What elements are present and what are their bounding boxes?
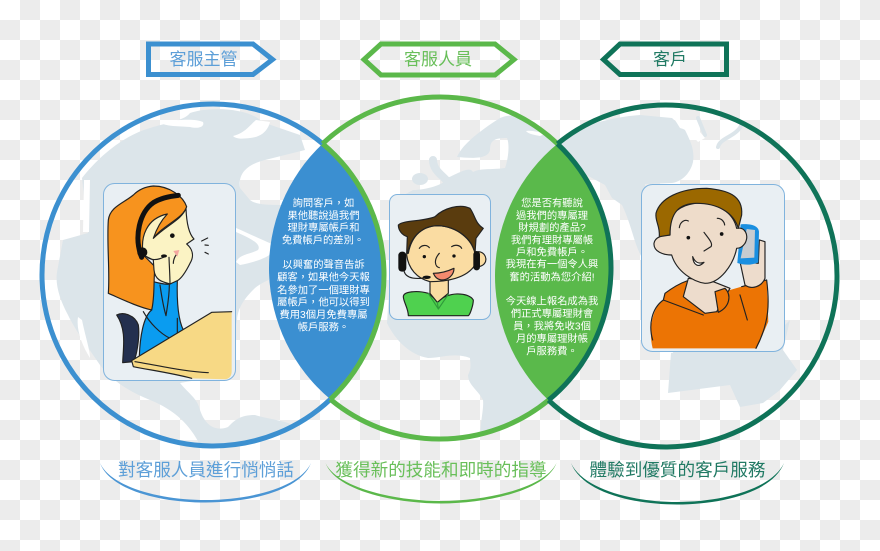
text: agent script: 財規劃的產品?: [518, 221, 586, 234]
text: supervisor instructions: 費用3個月免費專屬: [279, 308, 368, 321]
text: supervisor instructions: 屬帳戶，他可以得到: [277, 296, 370, 309]
panel: agent to customer overlap: [495, 144, 611, 400]
world map: North America: [56, 109, 305, 444]
text: supervisor instructions: 名參加了一個理財專: [277, 283, 370, 296]
illustration: man on mobile phone: [651, 188, 768, 348]
text: supervisor instructions: 以興奮的聲音告訴: [282, 258, 365, 271]
text: agent script: [506, 196, 598, 358]
tag: customer: 客戶: [653, 50, 687, 69]
text: agent script: 我現在有一個令人興: [506, 258, 598, 270]
text: supervisor instructions: 理財專屬帳戶和: [287, 221, 360, 234]
text: agent script: 戶服務費。: [526, 345, 578, 358]
circle: supervisor outline: [42, 104, 330, 446]
illustration: woman with headset: [108, 186, 232, 379]
caption: customer: 體驗到優質的客戶服務: [590, 460, 766, 480]
tag: supervisor: 客服主管: [170, 50, 238, 69]
card: customer illustration: [642, 184, 784, 352]
illustration: male agent with headset: [398, 206, 486, 316]
text: agent script: 過我們的專屬理: [516, 209, 588, 222]
text: supervisor instructions: 帳戶服務。: [298, 321, 349, 334]
text: supervisor instructions: 果他聽說過我們: [287, 209, 360, 222]
text: supervisor instructions: 顧客，如果他今天報: [277, 271, 370, 284]
text: supervisor instructions: [277, 196, 370, 334]
world map: Asia and Australia: [540, 115, 797, 407]
caption: agent: 獲得新的技能和即時的指導: [335, 460, 547, 480]
card: supervisor illustration: [104, 184, 236, 380]
tag: agent: [364, 44, 514, 75]
caption: supervisor: [100, 460, 311, 502]
text: agent script: 戶和免費帳戶。: [516, 245, 588, 258]
text: supervisor instructions: 免費帳戶的差別。: [282, 234, 364, 246]
tag: customer: [604, 44, 726, 74]
text: agent script: 今天線上報名成為我: [506, 294, 598, 307]
text: agent script: 員，我將免收3個: [513, 320, 591, 333]
caption: supervisor: 對客服人員進行悄悄話: [118, 460, 294, 480]
text: agent script: 您是否有聽說: [521, 196, 583, 210]
text: agent script: 們正式專屬理財會: [511, 307, 593, 320]
tag: agent: 客服人員: [404, 50, 472, 69]
text: supervisor instructions: 詢問客戶，如: [293, 196, 354, 210]
tag: supervisor: [148, 44, 272, 74]
panel: supervisor to agent overlap: [269, 144, 384, 399]
circle: customer outline: [548, 105, 837, 447]
caption: agent: [326, 460, 556, 504]
card: agent illustration: [390, 194, 490, 320]
text: agent script: 奮的活動為您介紹!: [509, 270, 595, 283]
world map: Europe and Africa: [387, 116, 556, 432]
text: agent script: 我們有理財專屬帳: [511, 234, 593, 246]
text: agent script: 月的專屬理財帳: [516, 332, 588, 345]
circle: agent outline: [323, 97, 558, 439]
caption: customer: [571, 460, 784, 504]
